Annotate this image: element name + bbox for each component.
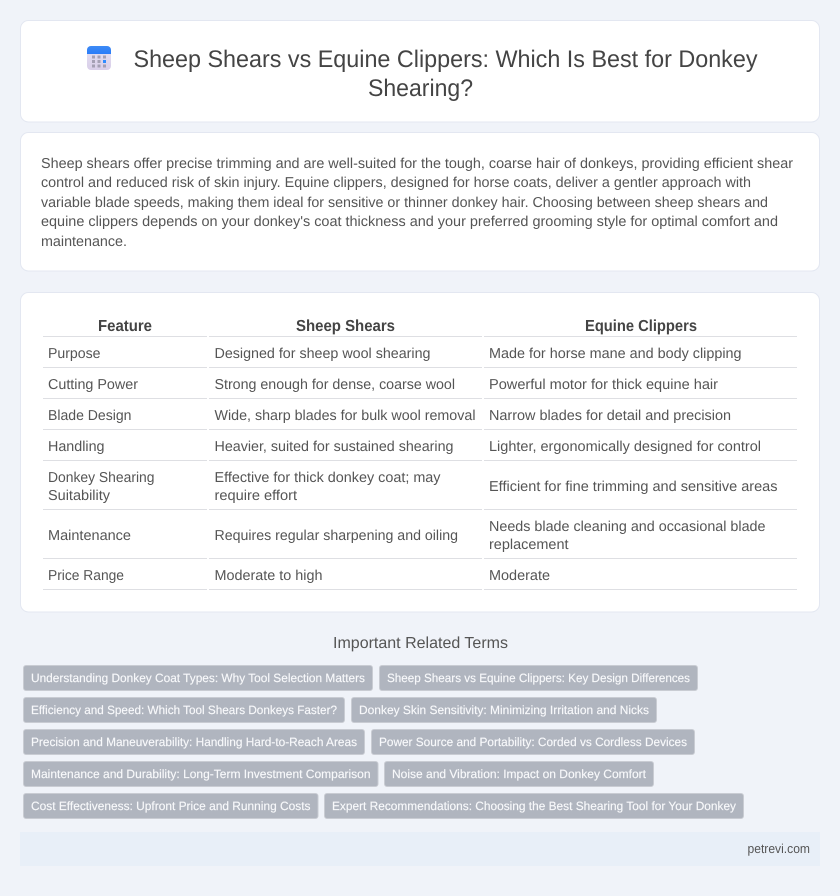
text block: introduction paragraph: equine clippers depends on your donkey's coat thickness and your preferred grooming style for optimal comfort and (41, 214, 778, 230)
heading: important related terms: Important Related Terms (333, 635, 508, 652)
panel: comparison table (20, 292, 820, 612)
tag (24, 666, 372, 690)
row: donkey shearing suitability (43, 470, 797, 510)
row: price range: Moderate to high (214, 568, 322, 584)
row: purpose: Purpose (48, 346, 100, 362)
row: purpose (43, 346, 797, 368)
row: price range: Price Range (48, 568, 124, 584)
text block: introduction paragraph: control and reduced risk of skin injury. Equine clippers, designed for horse coats, deliver a gentler approach with (41, 175, 751, 191)
text block: introduction paragraph: maintenance. (41, 234, 127, 250)
row: blade design: Narrow blades for detail and precision (489, 408, 731, 424)
tag (24, 762, 378, 786)
related term tags (24, 666, 744, 818)
row: cutting power: Cutting Power (48, 377, 138, 393)
tag (24, 698, 344, 722)
table header row: Sheep Shears (296, 318, 395, 335)
tag: Sheep Shears vs Equine Clippers: Key Design Differences (387, 671, 690, 685)
row: maintenance: replacement (489, 537, 568, 553)
tag: Noise and Vibration: Impact on Donkey Comfort (392, 767, 647, 781)
row: purpose: Made for horse mane and body clipping (489, 346, 742, 362)
row: maintenance (43, 519, 797, 559)
table header row: Feature (98, 318, 152, 335)
tag (324, 794, 744, 818)
row: handling: Heavier, suited for sustained shearing (214, 439, 454, 455)
row: handling (43, 439, 797, 461)
row: cutting power (43, 377, 797, 399)
row: donkey shearing suitability: Efficient for fine trimming and sensitive areas (489, 479, 778, 495)
row: handling: Handling (48, 439, 104, 455)
footer (20, 832, 820, 866)
row: maintenance: Needs blade cleaning and occasional blade (489, 519, 766, 535)
panel: introduction (20, 132, 820, 271)
row: purpose: Designed for sheep wool shearing (214, 346, 430, 362)
tag (384, 762, 654, 786)
row: donkey shearing suitability: require effort (214, 488, 297, 504)
table header row (43, 318, 797, 337)
row: price range: Moderate (489, 568, 550, 584)
tag: Power Source and Portability: Corded vs Cordless Devices (379, 735, 687, 749)
row: price range (43, 568, 797, 590)
row: donkey shearing suitability: Donkey Shearing (48, 470, 154, 486)
tag: Efficiency and Speed: Which Tool Shears Donkeys Faster? (31, 703, 337, 717)
text block: introduction paragraph: Sheep shears offer precise trimming and are well-suited for the tough, coarse hair of donkeys, providing efficient shear (41, 156, 793, 172)
row: cutting power: Strong enough for dense, coarse wool (214, 377, 455, 393)
title: Shearing? (368, 75, 473, 102)
tag: Donkey Skin Sensitivity: Minimizing Irritation and Nicks (359, 703, 649, 717)
tag: Understanding Donkey Coat Types: Why Tool Selection Matters (31, 671, 365, 685)
icon: calendar (87, 46, 111, 70)
tag (372, 730, 694, 754)
tag (24, 730, 364, 754)
row: donkey shearing suitability: Effective for thick donkey coat; may (214, 470, 441, 486)
table header row: Equine Clippers (585, 318, 697, 335)
row: maintenance: Requires regular sharpening and oiling (214, 528, 458, 544)
tag (24, 794, 318, 818)
row: donkey shearing suitability: Suitability (48, 488, 111, 504)
tag: Expert Recommendations: Choosing the Best Shearing Tool for Your Donkey (332, 799, 736, 813)
row: maintenance: Maintenance (48, 528, 131, 544)
tag (352, 698, 656, 722)
panel: header (20, 20, 820, 122)
row: blade design: Wide, sharp blades for bulk wool removal (214, 408, 476, 424)
tag: Cost Effectiveness: Upfront Price and Running Costs (31, 799, 310, 813)
row: cutting power: Powerful motor for thick equine hair (489, 377, 718, 393)
row: handling: Lighter, ergonomically designed for control (489, 439, 761, 455)
row: blade design: Blade Design (48, 408, 132, 424)
tag: Maintenance and Durability: Long-Term Investment Comparison (31, 767, 370, 781)
tag: Precision and Maneuverability: Handling Hard-to-Reach Areas (31, 735, 357, 749)
tag (380, 666, 698, 690)
row: blade design (43, 408, 797, 430)
title: Sheep Shears vs Equine Clippers: Which Is Best for Donkey (134, 46, 758, 73)
footer: petrevi.com (748, 841, 810, 856)
text block: introduction paragraph: variable blade speeds, making them ideal for sensitive or thinner donkey hair. Choosing between sheep shears and (41, 195, 768, 211)
